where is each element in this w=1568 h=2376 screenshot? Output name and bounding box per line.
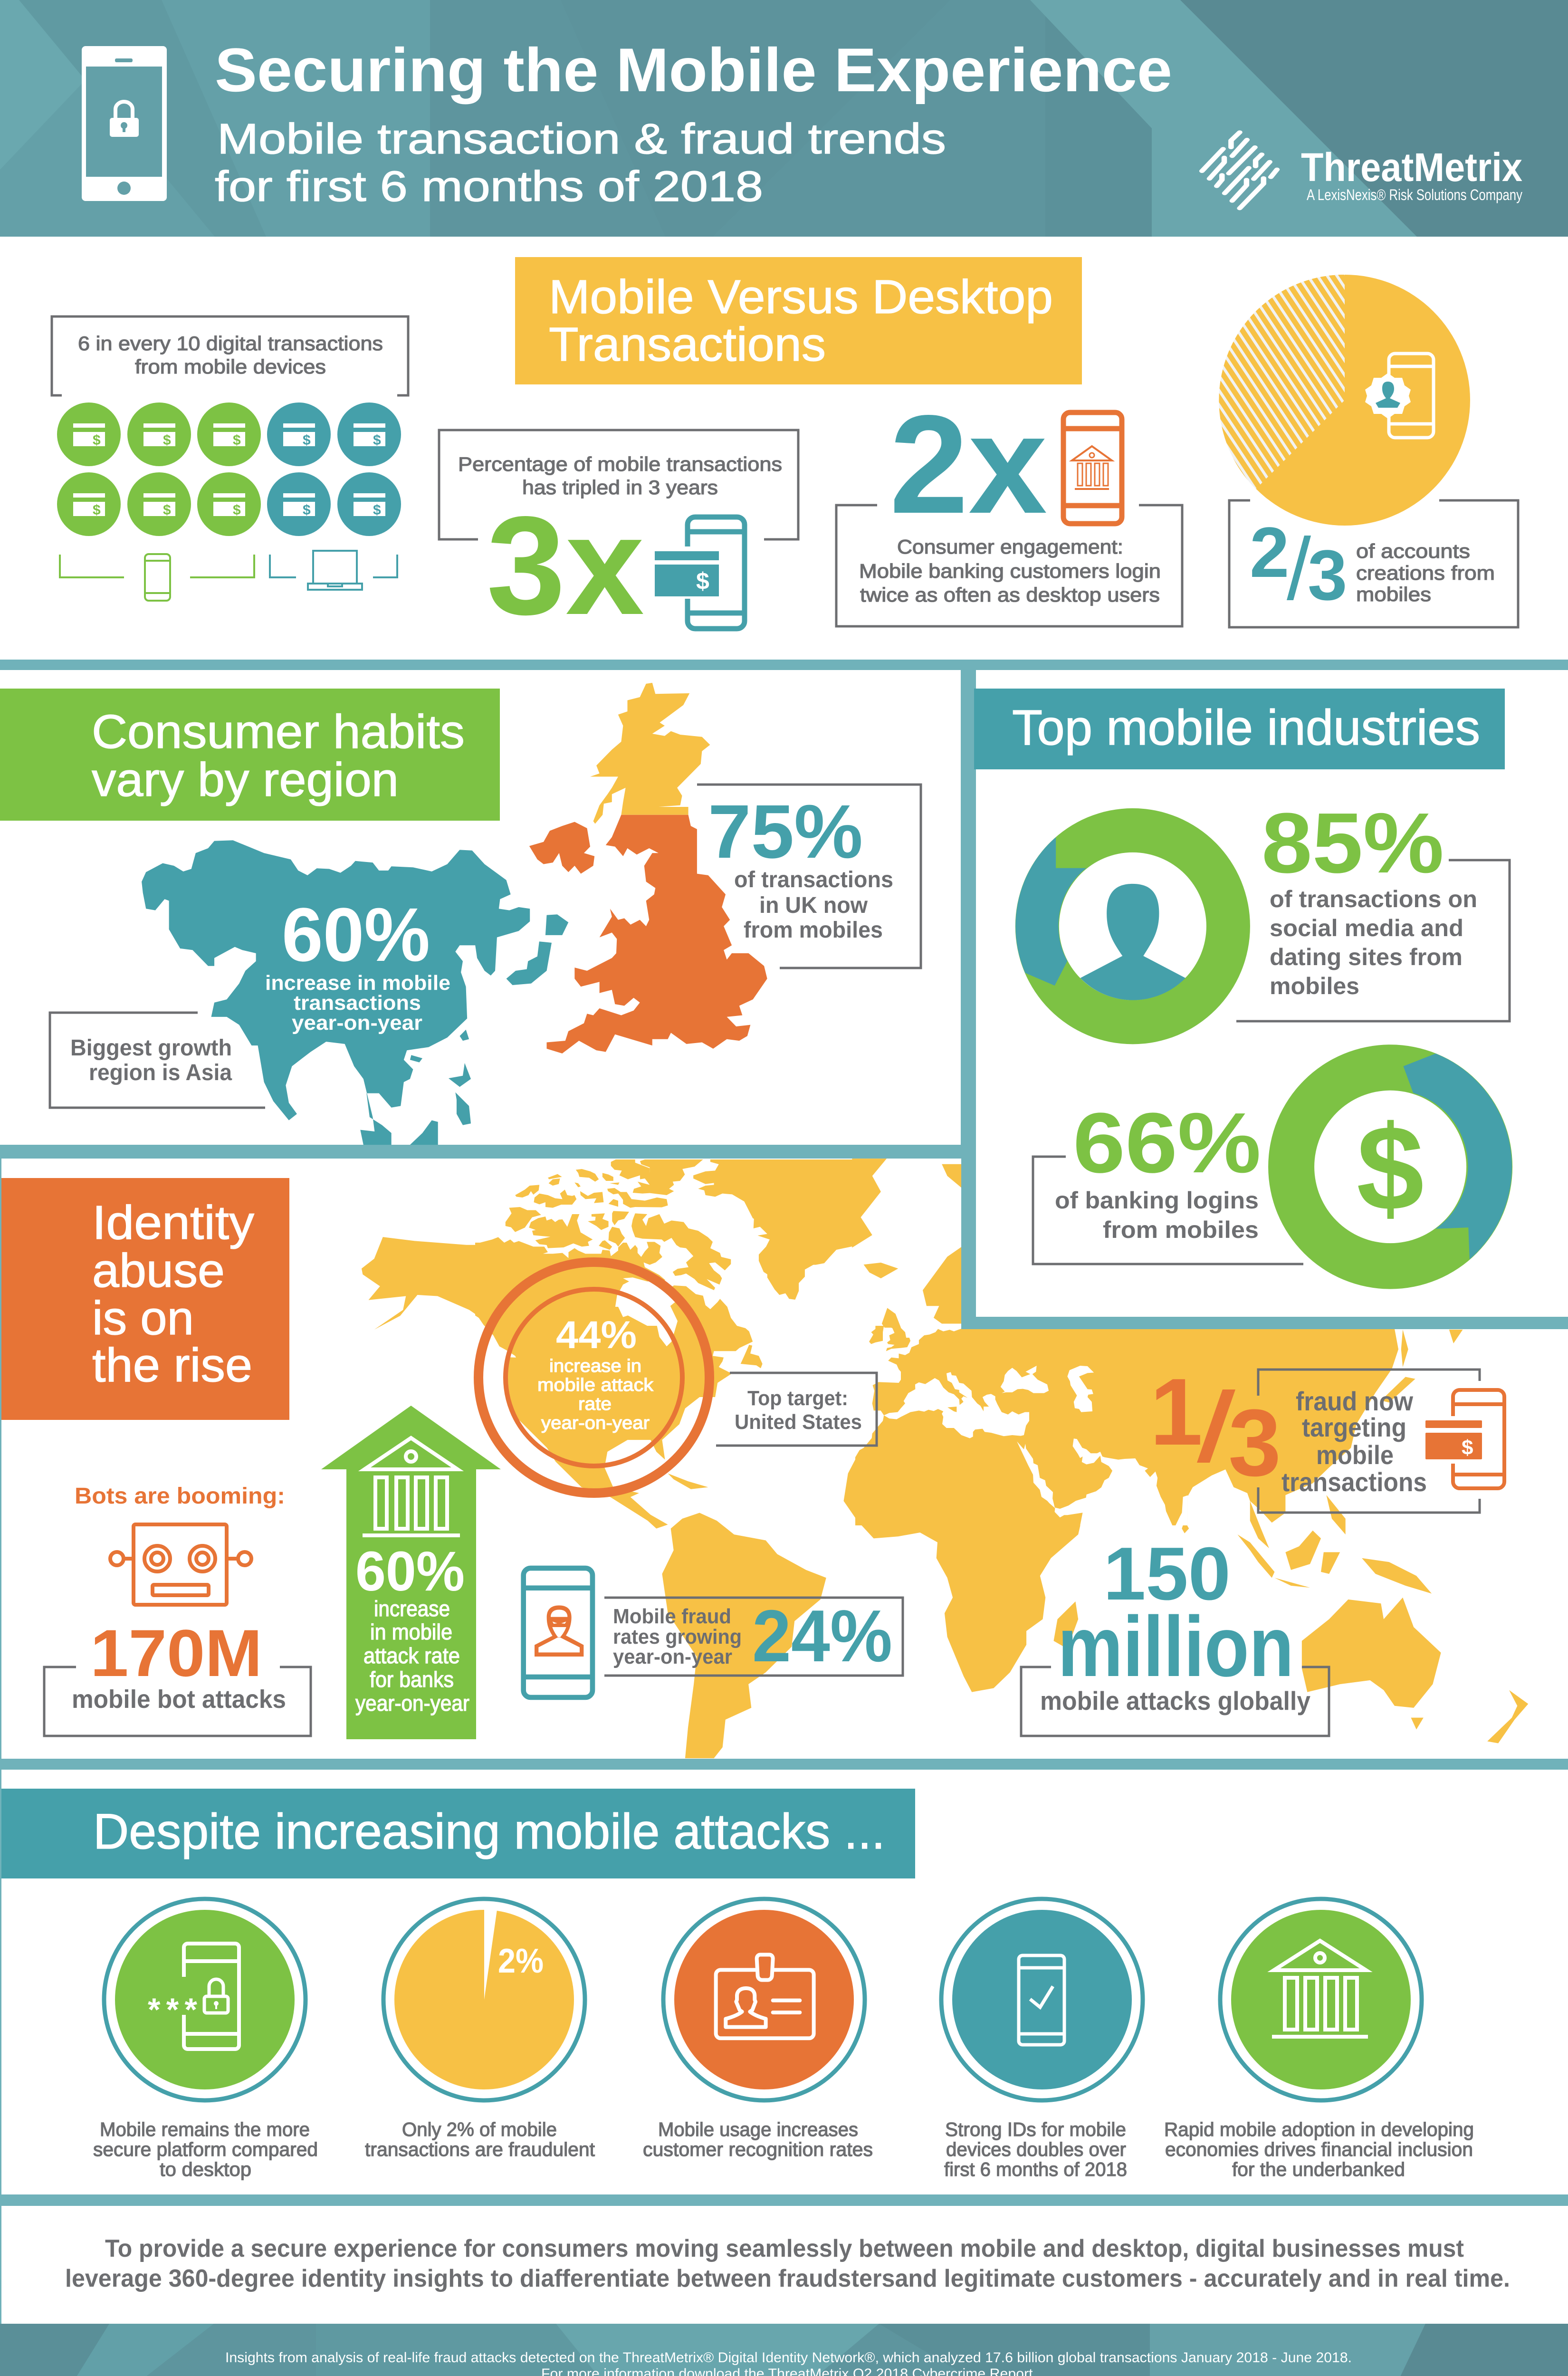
callout: 6 in every 10: 6 in every 10 digital transactions [78,332,383,354]
callout: 85 percent social media: 85% [1262,795,1444,891]
callout: two thirds accounts [1219,275,1518,627]
icon: robot [110,1524,251,1605]
icon grid: ten card circles: $ [373,502,381,518]
heading: identity abuse: abuse [92,1244,225,1297]
callout: 24 percent fraud rates: rates growing [613,1625,742,1648]
label: strong IDs: first 6 months of 2018 [944,2158,1127,2180]
icon grid: ten card circles [57,402,401,536]
heading: top mobile industries: Top mobile industries [1012,700,1480,756]
callout: 85 percent social media: of transactions on [1270,886,1477,912]
callout: 75 percent UK [697,785,921,968]
callout: 170M bot attacks [44,1616,311,1736]
icon: phone with card: $ [696,568,709,594]
icon grid: ten card circles: $ [233,502,241,518]
callout: 3x tripled [439,430,798,644]
callout: 85 percent social media: mobiles [1270,973,1359,999]
callout: 75 percent UK: 75% [708,789,863,874]
icon: secure phone circle: *** [148,1992,198,2028]
callout: biggest growth region [50,1013,265,1108]
arrow: 60 percent banks: year-on-year [355,1691,469,1715]
callout: 44 percent target rings [478,1262,709,1493]
callout: 2x engagement: 2x [889,386,1048,543]
chart: 66 percent donut: $ [1357,1101,1424,1236]
label: secure platform [93,2118,318,2180]
callout: 150 million attacks: mobile attacks globally [1040,1686,1310,1715]
callout: 44 percent target rings: rate [578,1394,612,1414]
Ireland [529,822,594,874]
chart: 2 percent pie [383,1899,585,2100]
icon grid: ten card circles: $ [163,502,171,518]
arrow: 60 percent banks: increase [374,1596,450,1621]
chart: 66 percent donut [1268,1044,1512,1289]
heading: mobile versus desktop: Transactions [549,318,826,371]
subtitle [215,115,946,211]
callout: 85 percent social media: dating sites from [1270,944,1463,970]
heading: mobile versus desktop [515,257,1082,384]
label: customer recognition: Mobile usage increases [658,2118,858,2140]
icon: phone with card [655,517,745,629]
panel: closing statement: leverage 360-degree identity insights to diafferentiate between fraudstersand legitimate customers - accurately and in real time. [65,2265,1510,2292]
logo: ThreatMetrix: ThreatMetrix [1301,145,1522,190]
callout: 24 percent fraud rates: Mobile fraud [613,1605,731,1628]
callout: 3x tripled: Percentage of mobile transactions [458,453,782,475]
title: Securing the Mobile Experience [215,35,1172,105]
label: secure platform: Mobile remains the more [100,2118,310,2140]
heading: consumer habits: Consumer habits [92,705,465,758]
icon: bank [363,1438,460,1535]
callout: 44 percent target rings: mobile attack [537,1375,654,1395]
footer text: Insights from analysis of real-life fraud attacks detected on the ThreatMetrix® Digital Identity Network®, which analyzed 17.6 billion global transactions January 2018 - June 2018. [225,2350,1352,2366]
label: financial inclusion: economies drives financial inclusion [1165,2138,1473,2160]
heading: identity abuse: Identity [92,1196,254,1249]
callout: one third fraud targeting mobile: fraud now [1296,1386,1413,1416]
callout: two thirds accounts: creations from [1356,562,1495,584]
callout: 85 percent social media [1236,795,1510,1021]
callout: 2x engagement [836,386,1182,626]
label: customer recognition [643,2118,873,2160]
heading: consumer habits: vary by region [92,753,399,806]
callout: 44 percent target rings: increase in [549,1356,641,1376]
icon grid: ten card circles: $ [303,502,311,518]
label: secure platform: secure platform compared [93,2138,318,2160]
icon: phone with check circle [941,1899,1143,2100]
callout: 60 percent Asia: transactions [294,991,421,1015]
callout: one third fraud targeting mobile: mobile [1316,1440,1394,1470]
callout: 60 percent Asia: year-on-year [292,1011,422,1035]
icon: phone with lock [82,46,167,201]
label: strong IDs: devices doubles over [946,2138,1126,2160]
callout: 75 percent UK: from mobiles [744,918,883,943]
heading: identity abuse: the rise [92,1339,252,1392]
icon: secure phone circle [104,1899,306,2100]
icon: orange phone with card: $ [1462,1436,1473,1459]
callout: 24 percent fraud rates: year-on-year [613,1645,732,1668]
callout: 60 percent Asia: increase in mobile [265,971,450,995]
callout: one third fraud targeting mobile: transactions [1281,1467,1427,1497]
logo: ThreatMetrix: A LexisNexis® Risk Solutions Company [1307,186,1522,203]
callout: two thirds accounts: 2 [1250,512,1289,592]
arrow: 60 percent banks: 60% [355,1540,465,1603]
subtitle: for first 6 months of 2018 [215,163,763,211]
callout: one third fraud targeting mobile: 1 [1150,1359,1203,1465]
arrow: 60 percent banks [321,1406,501,1739]
callout: 24 percent fraud rates [604,1595,903,1677]
panel: mobile versus desktop [0,237,1568,660]
callout: 2x engagement: Consumer engagement: [897,536,1123,558]
arrow: 60 percent banks: for banks [370,1667,454,1692]
heading: despite increasing mobile attacks [1,1789,915,1878]
callout: 75 percent UK: in UK now [759,893,868,918]
callout: one third fraud targeting mobile: targeting [1302,1412,1406,1442]
callout: top target United States: Top target: [747,1387,848,1410]
label: financial inclusion: Rapid mobile adoption in developing [1164,2118,1474,2140]
callout: one third fraud targeting mobile: 3 [1228,1390,1281,1496]
panel: identity abuse world map [1,1159,1568,1759]
icon grid: ten card circles: $ [233,432,241,448]
callout: 66 percent banking logins: 66% [1073,1095,1261,1191]
legend: desktop bracket and laptop [270,551,397,590]
icon grid: ten card circles: $ [93,502,101,518]
label: customer recognition: customer recognition rates [643,2138,873,2160]
label: financial inclusion [1164,2118,1474,2180]
callout: two thirds accounts: of accounts [1356,540,1470,562]
label: financial inclusion: for the underbanked [1232,2158,1405,2180]
heading: despite increasing mobile attacks: Despite increasing mobile attacks ... [93,1804,885,1859]
panel: top mobile industries [974,670,1568,1317]
callout: 6 in every 10 [52,316,408,395]
icon grid: ten card circles: $ [163,432,171,448]
callout: 170M bot attacks: 170M [90,1616,262,1690]
label: only 2 percent fraudulent: Only 2% of mobile [402,2118,557,2140]
callout: one third fraud targeting mobile [1150,1359,1480,1513]
callout: two thirds accounts: 3 [1308,535,1347,615]
England and Wales [547,815,767,1054]
callout: 85 percent social media: social media and [1270,915,1463,941]
header banner [0,0,1568,237]
callout: 75 percent UK: of transactions [734,867,893,892]
label: only 2 percent fraudulent: transactions are fraudulent [365,2138,595,2160]
label: secure platform: to desktop [160,2158,251,2180]
icon grid: ten card circles: $ [93,432,101,448]
chart: 2 percent pie: 2% [498,1942,544,1980]
callout: 60 percent Asia [265,892,450,1035]
icon: phone with fraudster [524,1568,593,1697]
map: Asia [142,840,568,1145]
callout: 3x tripled: has tripled in 3 years [522,476,718,498]
arrow: 60 percent banks: in mobile [370,1619,452,1644]
icon grid: ten card circles: $ [373,432,381,448]
callout: 2x engagement: Mobile banking customers login [859,560,1161,582]
chart: 85 percent donut [1015,808,1250,1044]
label: bots are booming: Bots are booming: [75,1484,285,1509]
callout: 170M bot attacks: mobile bot attacks [72,1685,286,1714]
heading: identity abuse [1,1178,289,1420]
icon: phone with bank [1063,412,1122,524]
icon grid: ten card circles: $ [303,432,311,448]
heading: consumer habits [0,689,500,821]
callout: 150 million attacks: million [1058,1599,1294,1695]
footer banner [0,2324,1568,2376]
callout: 150 million attacks [1021,1532,1329,1736]
map: world [362,1159,1528,1758]
label: strong IDs [944,2118,1127,2180]
callout: 3x tripled: 3x [487,487,645,644]
callout: biggest growth region: region is Asia [89,1060,232,1085]
legend: mobile bracket and phone [60,554,254,601]
icon: bank circle [1220,1899,1422,2100]
callout: 2x engagement: twice as often as desktop users [860,584,1160,606]
heading: top mobile industries [974,689,1505,769]
callout: 44 percent target rings: year-on-year [541,1413,650,1433]
chart: accounts pie [1219,275,1470,526]
label: strong IDs: Strong IDs for mobile [945,2118,1126,2140]
subtitle: Mobile transaction & fraud trends [217,115,946,163]
callout: 150 million attacks: 150 [1103,1532,1231,1616]
panel: closing statement: To provide a secure experience for consumers moving seamlessly between mobile and desktop, digital businesses must [105,2235,1464,2262]
callout: 66 percent banking logins [1033,1095,1303,1264]
icon: orange phone with card [1425,1390,1504,1488]
panel: closing statement [1,2206,1568,2324]
callout: 44 percent target rings: 44% [556,1313,637,1357]
callout: 24 percent fraud rates: 24% [752,1595,892,1677]
callout: biggest growth region: Biggest growth [70,1035,232,1061]
arrow: 60 percent banks: attack rate [363,1643,460,1668]
callout: 66 percent banking logins: of banking logins [1055,1187,1259,1214]
callout: two thirds accounts: mobiles [1356,583,1431,605]
label: only 2 percent fraudulent [365,2118,595,2160]
map: United Kingdom and Ireland [529,683,767,1054]
panel: consumer habits by region [0,670,961,1145]
footer text [225,2350,1352,2376]
icon: ID badge circle [663,1899,865,2100]
panel: despite increasing mobile attacks [1,1770,1568,2194]
strip frame: top industries border [961,670,1568,1329]
Scotland [590,683,710,824]
logo: ThreatMetrix [1202,132,1522,208]
callout: 66 percent banking logins: from mobiles [1103,1217,1259,1243]
callout: 6 in every 10: from mobile devices [135,355,326,378]
heading: mobile versus desktop: Mobile Versus Desktop [549,270,1053,324]
callout: top target United States: United States [735,1410,862,1434]
heading: identity abuse: is on [92,1292,194,1345]
callout: 60 percent Asia: 60% [282,892,430,977]
callout: top target United States [716,1373,877,1446]
seas: Mediterranean, Black, Caspian, Red, Arabian, Bengal [884,1366,1188,1525]
